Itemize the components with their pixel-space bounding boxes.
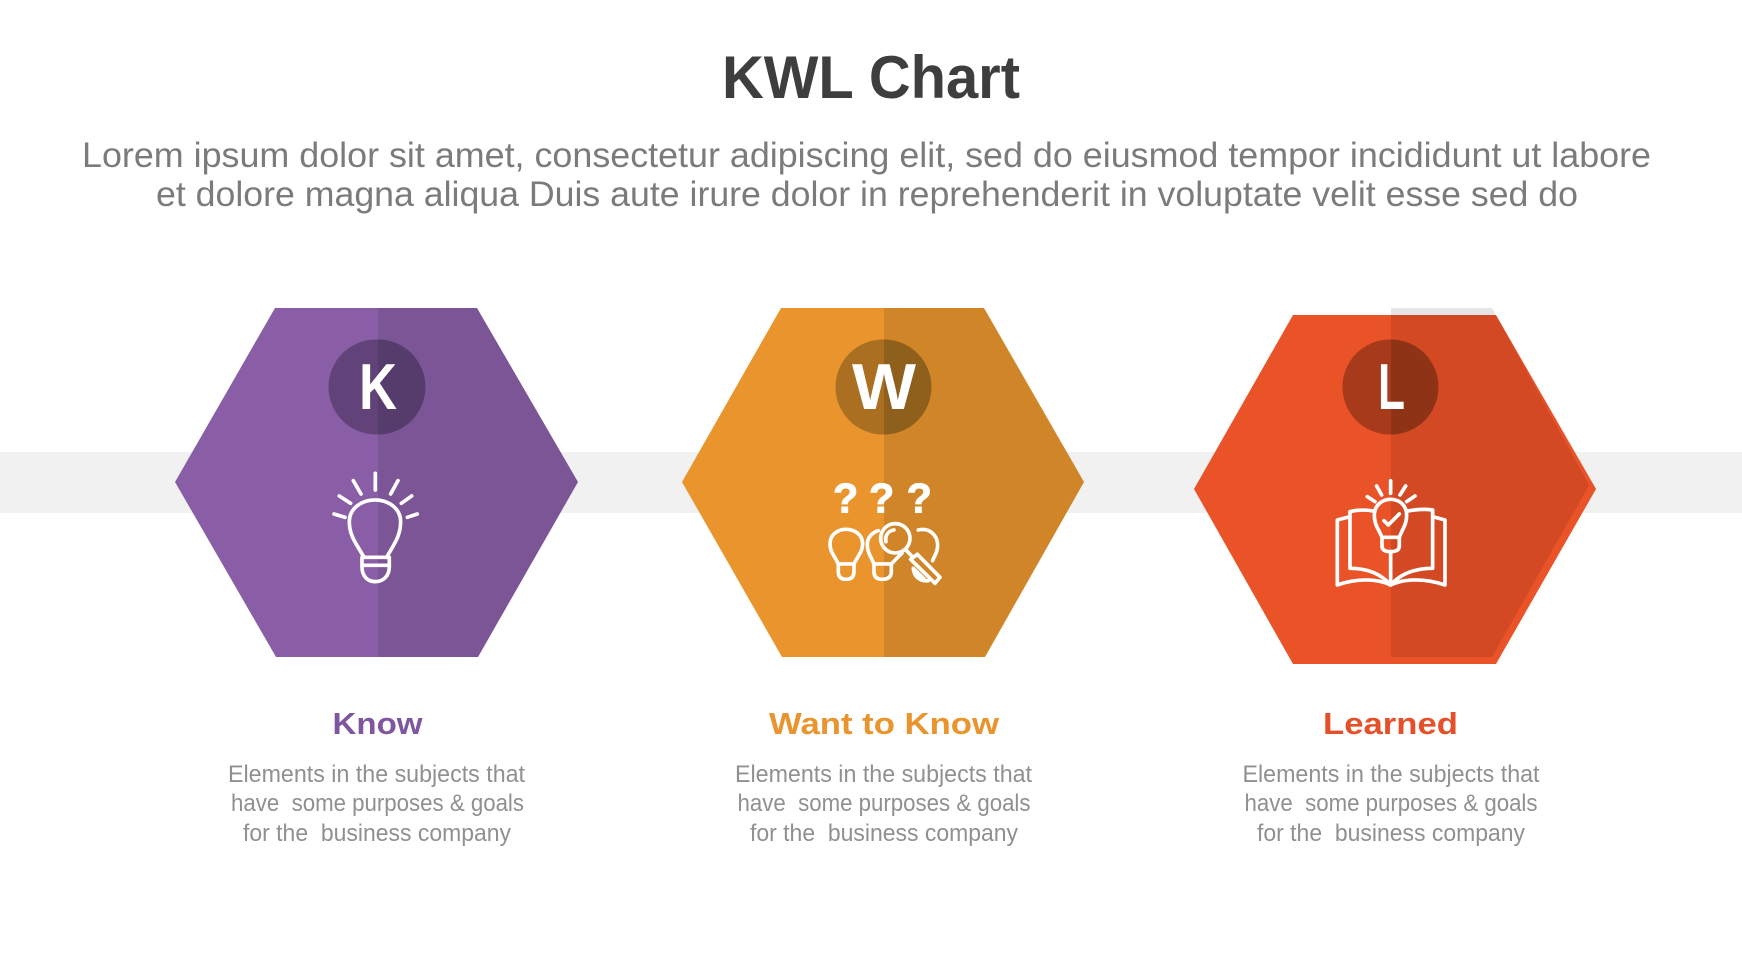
badge: K (328, 340, 425, 434)
title: KWL Chart (722, 44, 1020, 111)
icon: question marks, bulbs and magnifier (830, 475, 940, 583)
hexagon: Want to Know (682, 308, 1084, 657)
description: Know: for the business company (243, 820, 511, 847)
description: Learned: Elements in the subjects that (1242, 761, 1540, 788)
description: Know: have some purposes & goals (231, 790, 524, 817)
description: Want to Know (735, 761, 1032, 847)
question marks: ? (833, 475, 858, 521)
badge: W (836, 340, 931, 434)
question marks (833, 475, 932, 521)
panel: Know (175, 308, 578, 847)
badge: K: K (359, 350, 397, 423)
panel: Want to Know (682, 308, 1084, 847)
description: Want to Know: for the business company (750, 820, 1018, 847)
heading: Learned: Learned (1323, 706, 1458, 741)
bulbs and magnifier (830, 524, 940, 583)
panel: Learned (1194, 308, 1596, 847)
subtitle text block (82, 136, 1651, 214)
heading: Know: Know (332, 706, 423, 741)
hexagon: Know (175, 308, 578, 657)
hexagon: Learned (1194, 308, 1596, 664)
description: Learned: have some purposes & goals (1244, 790, 1538, 817)
question marks: ? (869, 475, 894, 521)
description: Learned: for the business company (1257, 820, 1525, 847)
description: Want to Know: Elements in the subjects that (735, 761, 1032, 788)
subtitle text block: et dolore magna aliqua Duis aute irure dolor in reprehenderit in voluptate velit esse sed do (156, 175, 1578, 214)
heading: Want to Know: Want to Know (769, 706, 1000, 741)
badge: L: L (1378, 350, 1405, 423)
badge: W: W (852, 350, 917, 423)
badge: L (1342, 340, 1438, 434)
subtitle text block: Lorem ipsum dolor sit amet, consectetur adipiscing elit, sed do eiusmod tempor incididunt ut labore (82, 136, 1651, 175)
question marks: ? (907, 475, 932, 521)
description: Know (228, 761, 525, 847)
description: Know: Elements in the subjects that (228, 761, 525, 788)
icon: light bulb (334, 473, 417, 582)
description: Learned (1242, 761, 1540, 847)
horizontal connecting band (0, 452, 1742, 513)
description: Want to Know: have some purposes & goals (738, 790, 1030, 817)
icon: open book with bulb (1337, 481, 1445, 585)
